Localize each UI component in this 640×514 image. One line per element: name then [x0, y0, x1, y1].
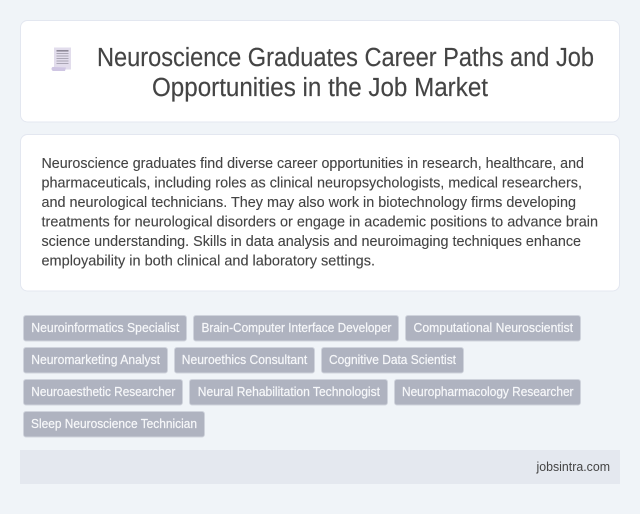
tag: Neural Rehabilitation Technologist: [198, 384, 380, 399]
text block: description: and neurological technicians. They may also work in biotechnology firms developing: [42, 194, 576, 211]
tag: [24, 412, 204, 437]
title: Neuroscience Graduates Career Paths and Job: [97, 44, 594, 72]
tag: [174, 348, 314, 373]
tag: [322, 348, 464, 373]
tag: Neuromarketing Analyst: [31, 352, 160, 367]
text block: description: treatments for neurological disorders or engage in academic positions to advance brain: [42, 214, 598, 230]
tag: [24, 348, 168, 373]
tag: Sleep Neuroscience Technician: [31, 416, 197, 431]
tag: [190, 380, 388, 405]
text block: description: [42, 155, 598, 270]
text block: description: science understanding. Skills in data analysis and neuroimaging techniques enhance: [42, 233, 581, 250]
tag: [24, 380, 182, 405]
title: Opportunities in the Job Market: [152, 74, 488, 102]
tag: Computational Neuroscientist: [414, 320, 573, 335]
icon: document scroll: [52, 48, 71, 71]
tag: Neuroinformatics Specialist: [31, 320, 180, 335]
panel: description: [20, 134, 620, 291]
title: [97, 44, 594, 102]
tag: Brain-Computer Interface Developer: [202, 320, 392, 335]
tag: [24, 316, 186, 341]
tag: [406, 316, 580, 341]
tag: Neuropharmacology Researcher: [402, 384, 574, 399]
text block: description: pharmaceuticals, including roles as clinical neuropsychologists, medical researchers,: [42, 174, 582, 192]
tag: [394, 380, 580, 405]
footer text: jobsintra.com: [536, 460, 610, 474]
tag: [194, 316, 398, 341]
footer: [20, 450, 620, 484]
text block: description: Neuroscience graduates find diverse career opportunities in research, healthcare, and: [42, 155, 584, 172]
tag: Neuroaesthetic Researcher: [31, 384, 176, 399]
tag: Cognitive Data Scientist: [329, 352, 456, 367]
tags: [24, 316, 580, 437]
panel: header: [20, 20, 620, 122]
tag: Neuroethics Consultant: [182, 352, 308, 367]
text block: description: employability in both clinical and laboratory settings.: [42, 252, 375, 270]
